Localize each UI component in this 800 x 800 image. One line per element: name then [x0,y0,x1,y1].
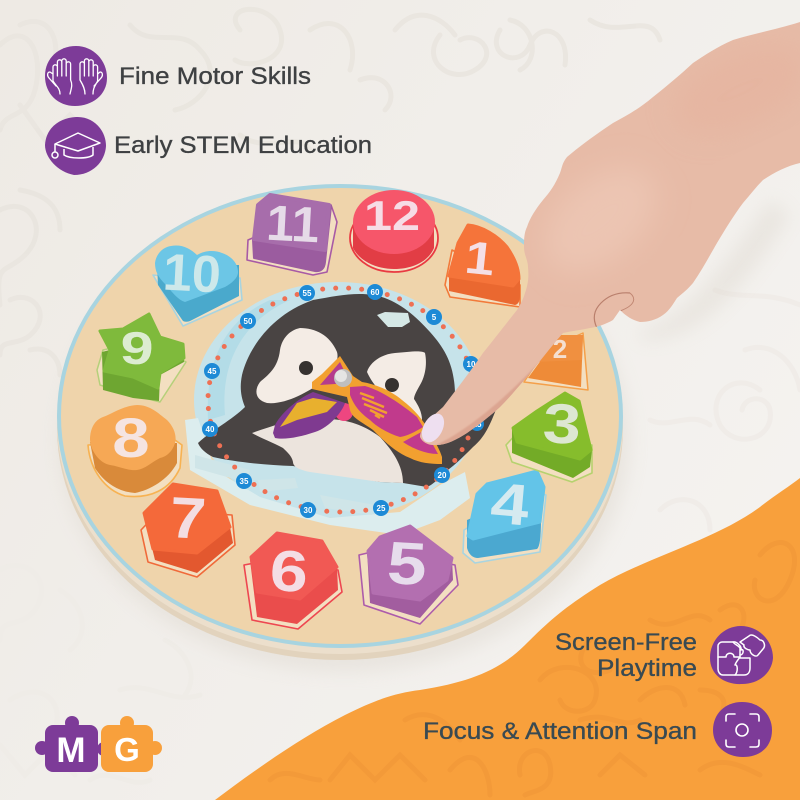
block 6 [244,533,342,629]
block 2 [524,333,588,390]
minute labels: 30 [304,506,313,515]
badge: early STEM education [45,117,372,175]
label: Early STEM Education [114,132,372,159]
minute labels: 25 [377,504,386,513]
fish hands [273,356,442,464]
minute labels: 20 [438,471,447,480]
dial ring [194,282,482,518]
minute labels: 50 [244,317,253,326]
orange G piece [101,716,162,772]
minute labels: 10 [467,360,476,369]
badge: focus and attention span [423,702,772,757]
penguin belly [252,419,403,483]
number blocks [88,190,592,629]
minute labels [202,284,484,518]
badge: fine motor skills [45,46,311,106]
label: Focus & Attention Span [423,718,697,745]
orange wave panel [215,478,800,800]
penguin body [198,294,497,487]
block 9 [97,314,186,402]
block 1: 1 [463,231,497,286]
short fish hand [273,392,353,439]
icon: puzzle [710,626,773,684]
block 4: 4 [488,471,532,538]
block 5: 5 [386,529,428,598]
penguin eyes [299,361,399,392]
minute labels: 60 [371,288,380,297]
minute labels: 45 [208,367,217,376]
block 11 [247,195,337,275]
penguin eye patches [256,328,426,420]
block 3 [506,392,592,482]
icon: graduation cap [45,117,106,175]
hand pointing at the clock [417,22,800,455]
block 6: 6 [268,539,310,605]
block 12 [350,190,438,272]
purple M piece [35,716,111,772]
minute labels: 15 [473,420,482,429]
block 10 [153,244,242,326]
label: Screen-Free [555,629,697,656]
shadow under clock [60,208,630,672]
long fish hand [312,356,442,464]
label: Playtime [597,655,697,682]
icon: focus frame [713,702,772,757]
ice patch [377,312,410,327]
block 7: 7 [168,485,208,552]
ice strip [185,418,470,535]
board [57,184,623,660]
block 12: 12 [364,192,420,239]
fingernail [417,410,449,446]
minute labels: 35 [240,477,249,486]
dotted minute ring [208,288,476,512]
block 8: 8 [112,407,150,470]
block 3: 3 [541,392,583,457]
badge: screen-free playtime [555,626,773,684]
block 10: 10 [161,244,222,304]
wooden clock puzzle [57,184,623,660]
logo: MG puzzle pieces [35,716,162,772]
block 1 [445,225,520,307]
icon: hands [45,46,107,106]
block 2: 2 [553,334,567,364]
minute labels: 55 [303,289,312,298]
M letter: M [56,731,86,770]
minute labels: 5 [432,313,437,322]
penguin dial [185,282,497,535]
hand shadow on table [640,200,790,340]
block 11: 11 [265,195,321,253]
block 7 [141,484,235,577]
label: Fine Motor Skills [119,63,311,90]
block 8 [88,405,182,497]
block 5 [359,526,458,624]
G letter: G [114,731,140,768]
block 9: 9 [119,323,155,375]
minute labels: 40 [206,425,215,434]
label [555,629,697,682]
block 4 [463,471,546,563]
